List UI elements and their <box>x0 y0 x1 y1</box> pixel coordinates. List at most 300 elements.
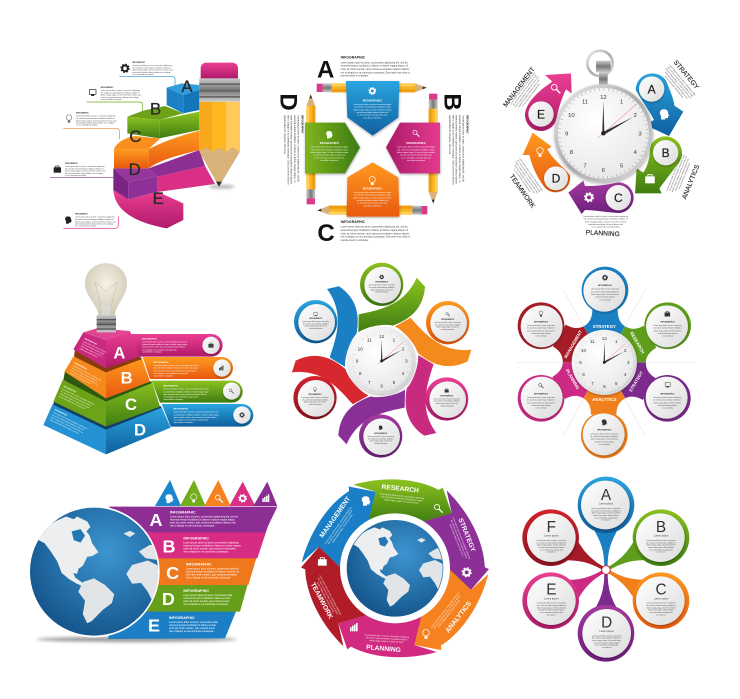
arrow E <box>525 73 572 131</box>
circle text: Lorem ipsum dolor sit amet, consectetur <box>654 324 682 327</box>
ribbon text: nostrud exercitation ullamco laboris nisi <box>356 111 389 114</box>
ring arrows <box>290 475 500 662</box>
text blocks: ex ea commodo consequat. <box>75 225 97 228</box>
circle text: ex ea commodo <box>662 408 673 410</box>
clock <box>348 327 415 395</box>
circle text: Lorem ipsum dolor sit amet, consectetur <box>527 324 556 327</box>
tier side text: Lorem ipsum dolor sit amet, consectetur adip <box>72 364 102 382</box>
ribbon D green <box>305 123 360 173</box>
petal content: irure dolor in <box>547 552 556 554</box>
ribbon text: dolore magna aliqua. Ut enim ad minim veniam <box>397 151 436 154</box>
circle text: dolore magna aliqua. Ut enim ad minim <box>654 401 682 404</box>
labels <box>502 59 702 238</box>
clock: 7 <box>591 381 594 386</box>
outer text: left: Lorem ipsum dolor sit amet, consectetur adipiscing elit, sed do <box>296 115 299 183</box>
petal content: ex ea commodo consequat duis <box>595 644 619 647</box>
ring text: dolore magna aliqua. Ut enim ad minim <box>449 524 464 557</box>
ribbon text: nisi ut aliquip ex ea commodo consequat duis <box>153 372 188 375</box>
text blocks: Lorem ipsum dolor sit amet, consectetur adipiscing <box>132 64 172 67</box>
outer text: left <box>283 115 305 185</box>
text blocks: nostrud exercitation ullamco laboris nisi ut aliquip <box>132 71 170 74</box>
ribbon text: INFOGRAPHIC <box>183 589 209 593</box>
triangle icons <box>165 494 269 503</box>
pencils <box>306 83 438 215</box>
petal content: ex ea commodo consequat duis <box>540 548 563 551</box>
circle text: dolore magna aliqua. Ut enim ad <box>305 325 327 328</box>
tier side text: INFOGRAPHIC <box>74 362 88 371</box>
ribbon text: irure dolor in reprehen <box>320 160 338 162</box>
text blocks: Lorem ipsum dolor sit amet, consectetur adipiscing <box>75 216 114 219</box>
globe <box>28 506 161 637</box>
ribbon text: nostrud exercitation ullamco laboris nisi <box>313 154 346 157</box>
petal content: Lorem ipsum dolor sit amet, consectetur <box>537 602 567 605</box>
ribbon text: INFOGRAPHIC <box>153 361 169 364</box>
circle text: elit, sed do eiusmod tempor incididunt <box>302 398 328 401</box>
tier side text: INFOGRAPHIC <box>84 337 98 346</box>
grey text blocks: nostrud exercitation ullamco laboris nisi <box>513 164 536 194</box>
ribbon text: nisi ut aliquip ex ea commodo consequat. <box>170 525 215 528</box>
tier side text: nostrud exercitation ullamco laboris <box>69 371 92 386</box>
tier side text: Lorem ipsum dolor sit amet, consectetur adipiscing eli <box>53 411 88 430</box>
ribbon letters: D <box>162 589 175 609</box>
outer text: bottom: Lorem ipsum dolor sit amet, consectetur adipiscing elit, sed do <box>341 226 408 229</box>
ring text: elit, sed do eiusmod tempor incididunt ut labore <box>450 519 468 560</box>
tier B <box>64 357 150 398</box>
tier gap B-C shadow <box>63 371 152 402</box>
ribbon buttons <box>202 337 251 424</box>
grey text blocks <box>509 64 697 229</box>
grey text blocks: dolore magna aliqua. Ut enim ad minim veni <box>514 161 539 195</box>
ring labels <box>309 484 477 654</box>
petal content: ex ea commodo consequat duis <box>649 611 673 614</box>
circle text: dolore magna aliqua. Ut enim ad <box>370 440 392 443</box>
clock: 7 <box>583 163 587 169</box>
tier side text: elit, sed do eiusmod tempor incidid <box>81 342 105 356</box>
ring text: Lorem ipsum dolor sit amet, consectetur adipiscing <box>318 575 342 615</box>
ribbon text: eiusmod tempor incididunt ut labore et dolore magna <box>183 544 241 547</box>
ribbon text: irure dolor in reprehen <box>363 117 381 119</box>
ribbon text: nisi ut aliquip ex ea commodo consequat. <box>183 603 229 606</box>
labels: STRATEGY <box>672 59 700 91</box>
text blocks: elit, sed do eiusmod tempor incididunt ut labore et <box>132 66 171 69</box>
outer text: right: INFOGRAPHIC <box>466 115 470 134</box>
ribbon text: enim ad minim veniam, quis nostrud exerc <box>169 627 216 630</box>
tier side text: dolore magna aliqua. Ut enim ad <box>80 345 102 357</box>
ribbon text: ex ea commodo consequat duis aute <box>401 156 431 159</box>
petal content: nostrud exercitation ullamco laboris <box>594 641 620 644</box>
ribbon text: INFOGRAPHIC <box>186 563 212 567</box>
panel: globe ribbons <box>28 480 277 642</box>
petals <box>549 310 660 415</box>
letters: D <box>129 160 141 179</box>
outer text: bottom: enim ad minim veniam, quis nostrud exercitation ullamco laboris <box>341 232 410 235</box>
ribbon icons <box>208 343 244 417</box>
clock: 1 <box>393 337 396 342</box>
ribbon C orange <box>347 162 399 217</box>
clock: 7 <box>368 380 371 385</box>
button letters: B <box>662 146 670 160</box>
step D purple <box>113 150 205 199</box>
ribbon text: nisi ut aliquip ex ea commodo consequat duis <box>163 396 198 399</box>
top triangles <box>155 480 277 506</box>
circles <box>522 477 689 662</box>
clock: 3 <box>638 132 642 138</box>
circle text: Lorem ipsum dolor sit amet, consectetur <box>653 396 682 399</box>
ring text: Lorem ipsum dolor sit amet, consectetur adipiscing <box>452 517 471 559</box>
ribbon text: Lorem ipsum dolor sit amet, consectetur adipiscing elit, sed <box>153 364 198 367</box>
tier side text: INFOGRAPHIC <box>63 385 77 394</box>
clock: 8 <box>570 150 573 156</box>
ribbon text: nisi ut aliquip ex ea commodo consequat. <box>183 550 229 553</box>
clock: 2 <box>634 113 637 119</box>
petal content: dolore magna aliqua. Ut enim ad minim <box>537 544 566 547</box>
letters <box>129 77 193 208</box>
tier side text <box>49 337 108 438</box>
ribbon A <box>130 334 223 357</box>
grey text blocks: nostrud exercitation ullamco laboris nisi <box>588 223 624 226</box>
tier side text: elit, sed do eiusmod tempor incididunt ut l <box>71 367 99 383</box>
ribbon A <box>108 507 277 532</box>
big letters: D <box>275 93 302 111</box>
panel: bulb pyramid <box>43 263 253 454</box>
ribbon text: enim ad minim veniam, quis nostrud exercitation ullamco <box>173 416 217 419</box>
ribbon text: enim ad minim veniam, quis nostrud exercitation ullamco <box>163 393 207 396</box>
outer text: top <box>341 55 411 78</box>
ribbon letters <box>148 510 179 636</box>
outer text: left: eiusmod tempor incididunt ut labore et dolore magna aliqua. Ut <box>293 115 296 183</box>
circle text: nostrud exercitation <box>440 404 453 407</box>
panel: petal flower <box>522 477 689 662</box>
circle text: dolore magna aliqua. Ut enim ad minim <box>527 401 555 404</box>
ring text <box>314 492 471 644</box>
ribbon text: eiusmod tempor incididunt ut labore et dolo <box>169 624 217 627</box>
petal content: elit, sed do eiusmod tempor incididunt ut <box>592 637 622 640</box>
clock: 6 <box>603 384 606 389</box>
tier side text: elit, sed do eiusmod tempor incididunt ut labore <box>60 390 92 407</box>
step A blue <box>167 83 199 113</box>
circle text: Lorem ipsum dolor sit amet, consectetur <box>434 321 462 324</box>
ribbon text: Lorem ipsum dolor sit amet, consectetur adipis <box>397 146 435 149</box>
circle text: elit, sed do eiusmod tempor incididunt ut <box>654 327 682 330</box>
text blocks: INFOGRAPHIC <box>132 61 146 64</box>
outer text: top: nisi ut aliquip ex ea commodo consequat. Duis aute irure dolor in <box>341 71 411 74</box>
grey text blocks: nostrud exercitation ullamco laboris nisi <box>674 158 690 192</box>
grey text blocks: ex ea commodo consequat duis <box>678 163 691 190</box>
circle text: Lorem ipsum dolor sit amet, consectetur <box>590 432 619 435</box>
panel: stopwatch <box>502 51 702 238</box>
clock: 10 <box>358 346 363 351</box>
grey text blocks: elit, sed do eiusmod tempor incididunt ut lab <box>512 73 538 107</box>
circle text: INFOGRAPHICS <box>440 394 454 397</box>
band labels: MANAGEMENT <box>563 329 583 359</box>
text blocks: INFOGRAPHIC <box>75 213 88 216</box>
circle text: Lorem ipsum dolor sit amet, consectetur <box>302 396 329 399</box>
grey text blocks: Lorem ipsum dolor sit amet, consectetur adipi <box>509 71 536 105</box>
petal content: nostrud exercitation ullamco laboris <box>648 609 674 612</box>
ribbon text: Lorem ipsum dolor sit amet, consectetur adipiscing elit, sed <box>173 411 218 414</box>
panel: metaball clock <box>517 267 695 458</box>
letters: C <box>129 127 141 146</box>
circle text: nostrud exercitation ullamco <box>595 296 615 299</box>
ribbon text: dolore magna aliqua. Ut enim ad minim veniam <box>310 151 349 154</box>
circle text: Lorem ipsum dolor sit amet, consectetur <box>302 320 330 323</box>
circle text: elit, sed do eiusmod tempor incididunt <box>435 323 461 326</box>
circle text: nostrud exercitation ullamco <box>595 440 614 443</box>
ribbon B <box>147 525 268 558</box>
arrow icons <box>537 84 669 202</box>
ribbon letters: A <box>149 510 162 530</box>
ribbon E <box>108 602 240 639</box>
ribbon text: INFOGRAPHICS <box>320 142 339 145</box>
clock: 1 <box>615 339 618 344</box>
outer text: bottom: eiusmod tempor incididunt ut labore et dolore magna aliqua. Ut <box>341 229 408 232</box>
petal content: elit, sed do eiusmod tempor incididunt ut <box>537 604 567 607</box>
tier gap C-D shadow <box>53 401 162 430</box>
outer text: top: eiusmod tempor incididunt ut labore et dolore magna aliqua. Ut <box>341 65 408 68</box>
clock: 4 <box>624 372 627 377</box>
petal content: Lorem ipsum dolor sit amet, consectetur <box>537 539 567 542</box>
ribbon text: elit, sed do eiusmod tempor incididunt ut labo <box>398 148 434 151</box>
petal content: A <box>601 487 612 504</box>
ribbon text: INFOGRAPHIC <box>142 337 158 340</box>
ring text: dolore magna aliqua. Ut enim ad minim <box>316 582 335 614</box>
ribbon text: nostrud exercitation ullamco laboris nisi <box>356 199 389 202</box>
ribbon text: nisi ut aliquip ex ea commodo consequat. <box>186 577 231 580</box>
ring text: dolore magna aliqua. Ut enim ad minim <box>384 498 419 505</box>
grey text blocks: elit, sed do eiusmod tempor incididunt ut lab <box>668 154 686 192</box>
petal content: Lorem ipsum <box>599 630 614 633</box>
grey text blocks: ex ea commodo consequat duis <box>664 75 684 99</box>
ring text: elit, sed do eiusmod tempor incididunt ut labore <box>317 577 339 616</box>
petal content: irure dolor in <box>601 520 611 522</box>
outer text: bottom: INFOGRAPHIC <box>341 220 366 224</box>
circle icons <box>313 275 450 430</box>
circle text: nostrud exercitation ullamco <box>531 404 551 407</box>
outer text: left: enim ad minim veniam, quis nostrud exercitation ullamco laboris <box>290 115 293 184</box>
arrow D <box>523 133 570 192</box>
text blocks: ex ea commodo consequat. <box>101 98 123 101</box>
grey text blocks: nostrud exercitation ullamco laboris nisi <box>517 78 541 108</box>
text blocks: nostrud exercitation ullamco laboris nisi ut aliquip <box>75 223 113 226</box>
ribbon text <box>169 511 241 633</box>
petal content: elit, sed do eiusmod tempor incididunt ut <box>591 509 621 512</box>
tier letters: D <box>134 421 146 440</box>
ring labels: ANALYTICS <box>445 600 473 634</box>
ribbon text <box>142 337 219 424</box>
grey text blocks: ex ea commodo consequat duis <box>592 226 620 229</box>
ribbon text: nisi ut aliquip ex ea commodo consequat. <box>169 630 214 633</box>
outer text: right <box>448 115 470 185</box>
satellite circles <box>293 263 469 458</box>
letters: B <box>150 100 161 119</box>
circle text: INFOGRAPHICS <box>661 320 675 323</box>
circle text: ex ea commodo <box>599 299 611 301</box>
labels: PLANNING <box>586 229 620 238</box>
band labels: PLANNING <box>565 368 581 391</box>
clock: 4 <box>402 371 405 376</box>
tier side text: nostrud exercitation ullamco laboris nisi ut <box>58 395 86 411</box>
grey text blocks: dolore magna aliqua. Ut enim ad minim veni <box>665 68 692 100</box>
ribbon text: Lorem ipsum dolor sit amet, consectetur adipis <box>353 103 391 106</box>
text blocks: Lorem ipsum dolor sit amet, consectetur adipiscing <box>65 165 104 168</box>
circle icons <box>539 275 670 425</box>
ribbon text: enim ad minim veniam, quis nostrud exercitation <box>183 547 236 550</box>
text blocks: dolore magna aliqua. Ut enim ad minim veniam, quis <box>75 220 116 223</box>
petal content: D <box>601 614 612 631</box>
circle text: nostrud exercitation <box>375 291 388 294</box>
text blocks: INFOGRAPHIC <box>101 86 114 89</box>
text blocks: Lorem ipsum dolor sit amet, consectetur adipiscing <box>101 89 140 92</box>
ribbon text: eiusmod tempor incididunt ut labore et dolore magna aliqua. <box>170 519 236 522</box>
tier gap A-B shadow <box>74 349 142 372</box>
petal content <box>537 487 676 649</box>
petal content: irure dolor in <box>656 614 666 616</box>
ribbon text: enim ad minim veniam, quis nostrud exercitation ullamco <box>142 346 185 349</box>
grey text blocks: nostrud exercitation ullamco laboris nisi <box>664 71 689 100</box>
ribbon text: eiusmod tempor incididunt ut labore et dolore ma <box>186 571 240 574</box>
petal content: nostrud exercitation ullamco laboris <box>538 546 564 549</box>
circle text: dolore magna aliqua. Ut enim ad minim <box>591 293 619 296</box>
ribbon text: Lorem ipsum dolor sit amet, consectetur adip <box>183 594 233 597</box>
stems <box>564 528 648 612</box>
tier side text: nostrud exercitation ullamco <box>79 347 98 358</box>
petal content: ex ea commodo consequat duis <box>594 516 618 519</box>
circle text: dolore magna aliqua. Ut enim ad minim <box>654 329 682 332</box>
petal content: Lorem ipsum dolor sit amet, consectetur <box>592 634 622 637</box>
petal content: nostrud exercitation ullamco laboris <box>538 609 564 612</box>
ribbon text: INFOGRAPHICS <box>363 187 382 190</box>
ribbon text: INFOGRAPHIC <box>183 536 209 540</box>
outer text: right: enim ad minim veniam, quis nostrud exercitation ullamco laboris <box>455 115 458 184</box>
circle text: dolore magna aliqua. Ut enim ad <box>437 326 459 329</box>
petal content: Lorem ipsum <box>654 597 668 600</box>
grey text blocks: dolore magna aliqua. Ut enim ad minim veni <box>671 155 688 193</box>
band labels: ANALYTICS <box>592 397 617 402</box>
circle text: elit, sed do eiusmod tempor incididunt ut <box>653 399 682 402</box>
outer text: bottom: reprehenderit in voluptate. <box>341 239 369 242</box>
circle text: elit, sed do eiusmod tempor incididunt <box>434 400 460 403</box>
circle text: nostrud exercitation ullamco <box>658 332 678 335</box>
circle text: elit, sed do eiusmod tempor incididunt ut <box>527 399 556 402</box>
ribbon A blue <box>346 81 399 136</box>
swoosh bands <box>288 278 476 444</box>
petal content: elit, sed do eiusmod tempor incididunt ut <box>646 604 676 607</box>
light bulb <box>85 263 127 332</box>
circle text: INFOGRAPHICS <box>309 393 322 396</box>
tier side text: dolore magna aliqua. Ut enim ad minim ven <box>70 369 98 386</box>
circle text: Lorem ipsum dolor sit amet, consectetur <box>433 397 461 400</box>
ribbon text: enim ad minim veniam, quis nostrud exercitation ullamco lab <box>170 522 236 525</box>
circle text: elit, sed do eiusmod tempor incididunt ut <box>527 327 556 330</box>
ribbon icons <box>326 88 419 185</box>
step E pink <box>113 166 215 228</box>
ribbon text: Lorem ipsum dolor sit amet, consectetur adipis <box>310 146 348 149</box>
ring labels: MANAGEMENT <box>319 496 352 539</box>
clock: 3 <box>405 359 408 364</box>
panel: globe arrow ring <box>290 475 500 662</box>
clock <box>554 84 652 182</box>
ribbon text: irure dolor in reprehen <box>407 160 425 162</box>
ring text: Lorem ipsum dolor sit amet, consectetur adipiscing <box>380 492 424 500</box>
circle text: Lorem ipsum dolor sit amet, consectetur <box>367 435 395 438</box>
circle text: dolore magna aliqua. Ut enim ad minim <box>591 438 619 441</box>
icons <box>54 64 129 224</box>
petal content: E <box>546 582 556 599</box>
circle text: INFOGRAPHICS <box>598 284 613 287</box>
clock: 11 <box>367 337 372 342</box>
ring text: elit, sed do eiusmod tempor incididunt ut labore <box>327 508 354 545</box>
clock: 3 <box>627 360 630 365</box>
ribbon text: eiusmod tempor incididunt ut labore et dolore magna aliqua <box>173 413 219 416</box>
ribbon text: Lorem ipsum dolor sit amet, consectetur adipiscing <box>183 541 239 544</box>
ribbon text: dolore magna aliqua. Ut enim ad minim veniam <box>353 108 392 111</box>
circle text: nostrud exercitation <box>309 327 322 330</box>
band labels <box>563 324 646 402</box>
clock: 11 <box>582 100 588 106</box>
petal content: elit, sed do eiusmod tempor incididunt ut <box>537 541 567 544</box>
grey text blocks: dolore magna aliqua. Ut enim ad minim veni <box>514 75 540 108</box>
outer text: bottom: nisi ut aliquip ex ea commodo consequat. Duis aute irure dolor in <box>341 236 411 239</box>
text blocks: nostrud exercitation ullamco laboris nisi ut aliquip <box>101 96 139 99</box>
petal content: dolore magna aliqua. Ut enim ad minim <box>537 606 566 609</box>
ribbon B pink <box>386 123 440 173</box>
buttons <box>528 76 678 210</box>
tier A <box>73 328 139 368</box>
tier side text: Lorem ipsum dolor sit amet, consectetur adipiscing <box>62 388 95 406</box>
text blocks: elit, sed do eiusmod tempor incididunt ut labore et <box>65 167 104 170</box>
shadow <box>208 185 235 188</box>
circle text: dolore magna aliqua. Ut enim ad <box>436 402 458 405</box>
petal content: Lorem ipsum <box>544 597 559 600</box>
circle text: INFOGRAPHICS <box>441 318 455 321</box>
clock <box>572 330 637 395</box>
petal content: dolore magna aliqua. Ut enim ad minim <box>592 512 621 515</box>
text blocks: ex ea commodo consequat. <box>76 124 98 127</box>
petal content: dolore magna aliqua. Ut enim ad minim <box>647 606 676 609</box>
circle text: elit, sed do eiusmod tempor incididunt <box>303 322 329 325</box>
ribbon D <box>147 576 250 612</box>
petal content: irure dolor in <box>656 552 666 554</box>
big letters <box>275 56 466 247</box>
ring text: elit, sed do eiusmod tempor incididunt ut labore <box>433 594 462 629</box>
text blocks: Lorem ipsum dolor sit amet, consectetur adipiscing <box>76 115 115 118</box>
tier side text: elit, sed do eiusmod tempor incididunt ut labore et <box>51 413 85 432</box>
outer text: right: Lorem ipsum dolor sit amet, consectetur adipiscing elit, sed do <box>461 115 464 183</box>
ring text: Lorem ipsum dolor sit amet, consectetur adipiscing <box>430 592 460 629</box>
ribbon text: ex ea commodo consequat duis aute <box>314 156 344 159</box>
circle text: INFOGRAPHICS <box>660 392 675 395</box>
clock: 10 <box>581 348 586 353</box>
clock: 8 <box>359 371 362 376</box>
circle text: elit, sed do eiusmod tempor incididunt <box>368 437 394 440</box>
ribbon text: elit, sed do eiusmod tempor incididunt ut labo <box>354 106 391 109</box>
circle text: dolore magna aliqua. Ut enim ad <box>304 401 326 404</box>
circle text: Lorem ipsum dolor sit amet, consectetur <box>527 396 556 399</box>
outer text: left: nisi ut aliquip ex ea commodo consequat. Duis aute irure dolor in <box>286 115 289 185</box>
clock: 1 <box>620 100 623 106</box>
circle text: ex ea commodo <box>535 408 547 410</box>
ribbon text: Lorem ipsum dolor sit amet, consectetur adipiscing elit, sed <box>142 340 187 343</box>
ribbon text: Lorem ipsum dolor sit amet, consectetur adipis <box>353 191 391 194</box>
petal content: Lorem ipsum <box>599 503 613 506</box>
circle text: INFOGRAPHICS <box>375 281 389 284</box>
outer text: left: INFOGRAPHIC <box>301 115 305 134</box>
text blocks: elit, sed do eiusmod tempor incididunt ut labore et <box>76 117 115 120</box>
ribbon text: enim ad minim veniam, quis nostrud exercitation ullamco <box>153 369 197 372</box>
ribbon text: nisi ut aliquip ex ea commodo consequat duis <box>173 419 208 422</box>
grey text blocks: ex ea commodo consequat duis <box>521 83 541 107</box>
panel: pencil staircase <box>50 61 240 228</box>
